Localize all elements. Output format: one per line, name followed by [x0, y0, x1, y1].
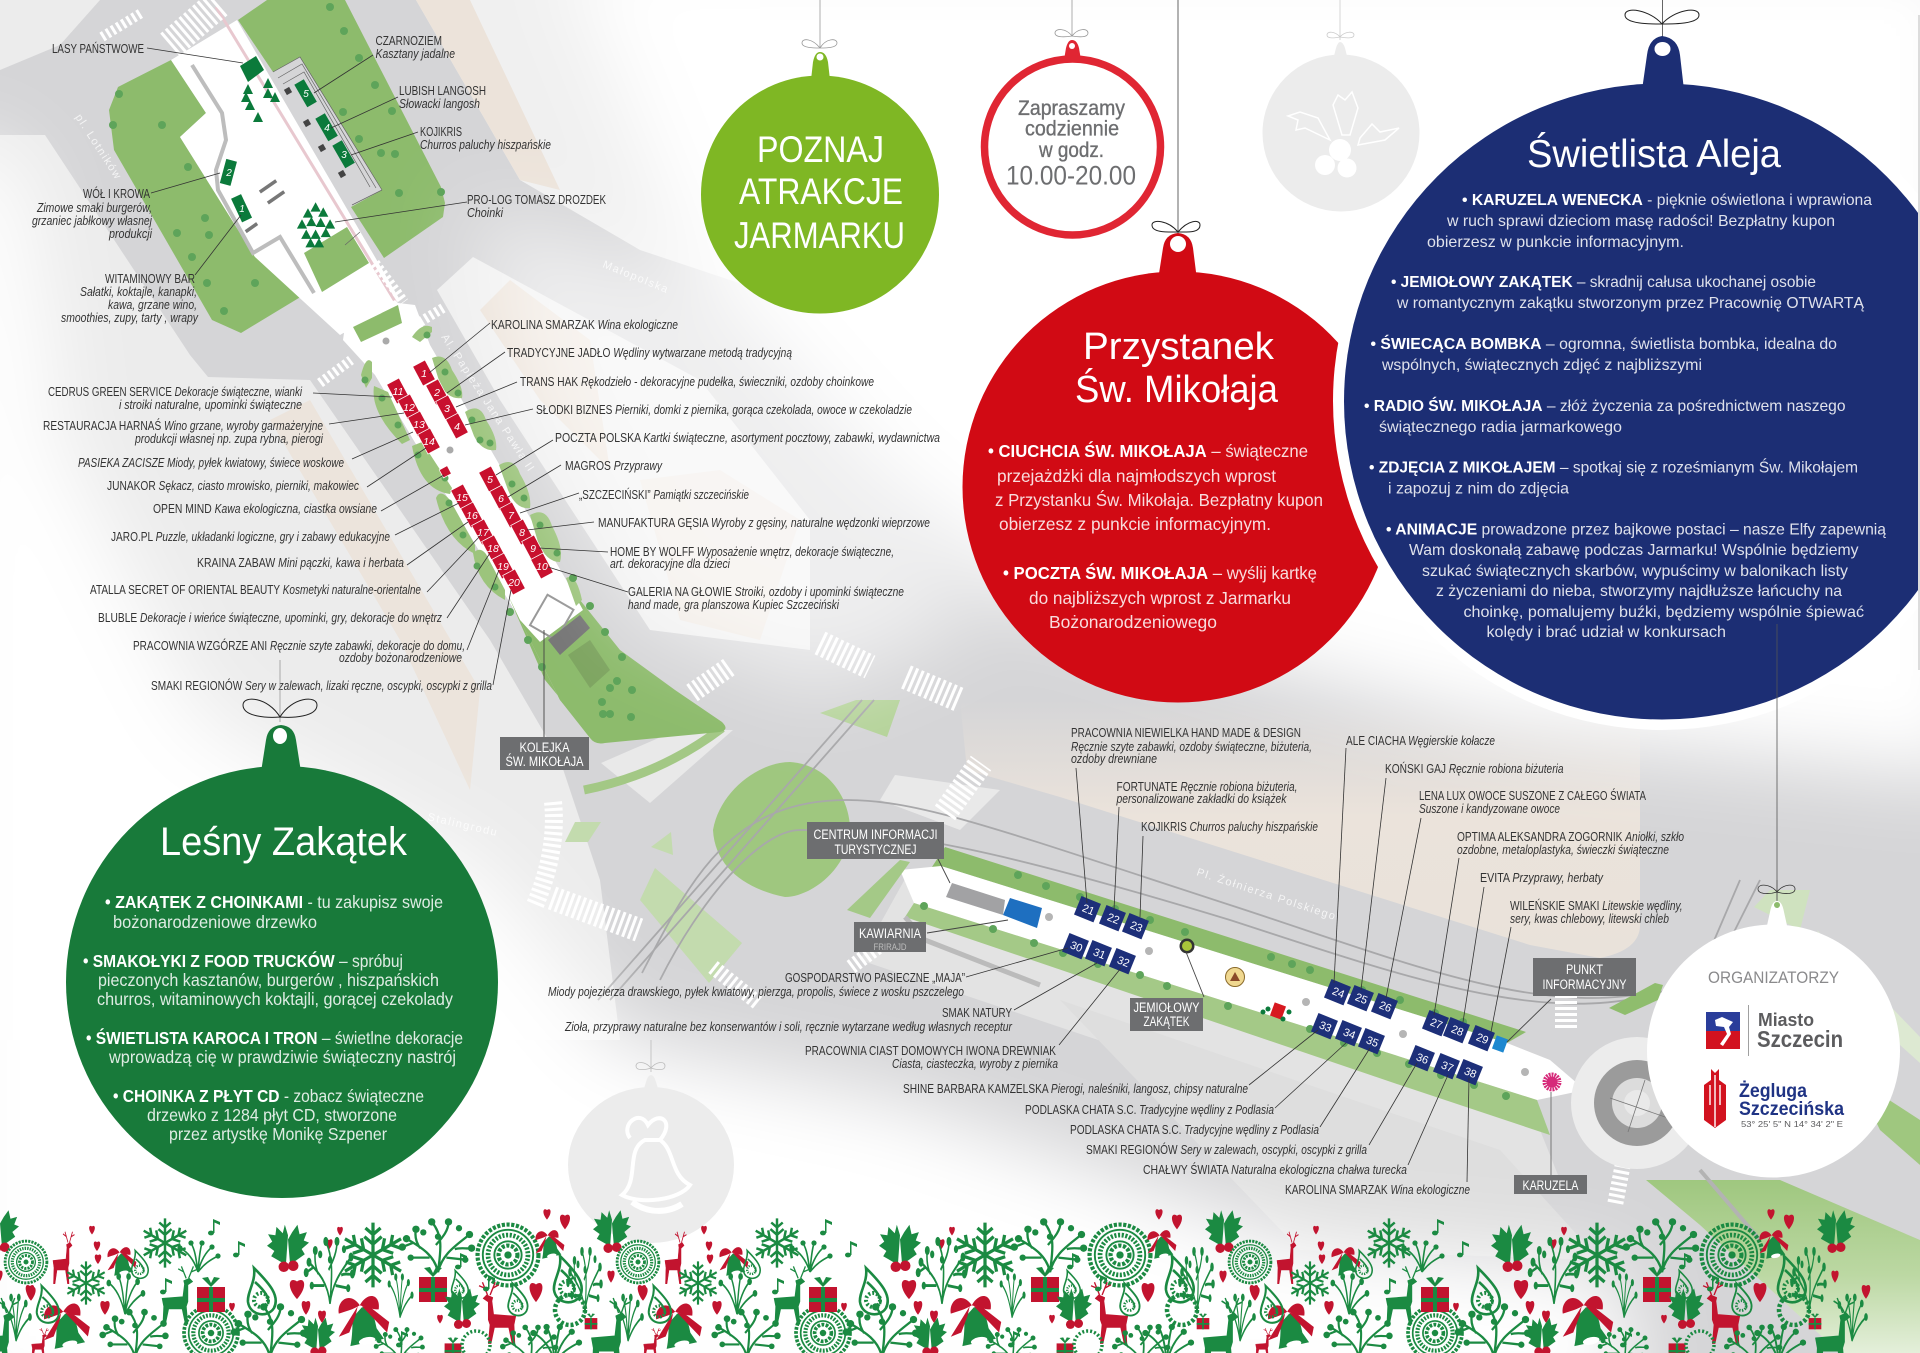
ornament: Leśny Zakątek: wprowadzą cię w prawdziwie świąteczny nastrój — [108, 1047, 456, 1067]
icon: carousel — [1542, 1072, 1562, 1092]
label: Wół i Krowa: Zimowe smaki burgerów, — [36, 201, 152, 215]
ornament: Świetlista Aleja: • RADIO ŚW. MIKOŁAJA – złóż życzenia za pośrednictwem naszego — [1364, 396, 1846, 415]
label: Szczeciński — [520, 487, 749, 513]
label: Atalla: ATALLA SECRET OF ORIENTAL BEAUTY Kosmetyki naturalne-orientalne — [90, 583, 421, 597]
red stalls 1-20: 3 — [444, 403, 450, 415]
ornament: Leśny Zakątek — [66, 660, 498, 1198]
icon: mistletoe — [1180, 938, 1194, 954]
label: Restauracja Harnaś: RESTAURACJA HARNAŚ Wino grzane, wyroby garmażeryjne — [43, 418, 323, 433]
label: Lasy Państwowe — [52, 41, 243, 63]
label: Pro-Log: PRO-LOG TOMASZ DROZDEK — [467, 193, 607, 207]
decorative christmas pattern band — [0, 1209, 1870, 1353]
ornament: Przystanek Św. Mikołaja: do najbliższych wprost z Jarmarku — [1029, 588, 1291, 608]
label: Pracownia Ciast — [805, 968, 1121, 1071]
tag: Jemiołowy Zakątek — [1130, 952, 1204, 1031]
label: Pasieka Zacisze: PASIEKA ZACISZE Miody, pyłek kwiatowy, świece woskowe — [78, 456, 344, 470]
label: Smaki Regionów plaza — [1086, 1063, 1417, 1157]
map labels top — [32, 34, 607, 325]
tag: Punkt Informacyjny: INFORMACYJNY — [1542, 977, 1626, 992]
label: Open Mind: OPEN MIND Kawa ekologiczna, ciastka owsiane — [153, 502, 377, 516]
label: Podlaska Chata 1 — [1025, 1043, 1346, 1117]
label: Lubish Langosh: Słowacki langosh — [399, 97, 480, 111]
ornament: gray holly — [1262, 0, 1420, 212]
label: Pracownia Niewielka: ozdoby drewniane — [1071, 752, 1157, 766]
ornament: Leśny Zakątek: • ZAKĄTEK Z CHOINKAMI - tu zakupisz swoje — [105, 892, 443, 912]
label: Poczta Polska: POCZTA POLSKA Kartki świąteczne, asortyment pocztowy, zabawki, wydawnictwa — [555, 431, 940, 445]
red stalls 1-20: 18 — [487, 543, 499, 555]
navy stalls 21-38: 29 — [1474, 1031, 1490, 1047]
ornament: Leśny Zakątek: • CHOINKA Z PŁYT CD - zobacz świąteczne — [113, 1086, 424, 1106]
tag: Kolejka — [500, 630, 589, 770]
ornament: opening hours: 10.00-20.00 — [1006, 160, 1136, 190]
label: Smaki Regionów: SMAKI REGIONÓW Sery w zalewach, lizaki ręczne, oscypki, oscypki z grilla — [151, 678, 492, 693]
navy stalls 21-38: 22 — [1105, 911, 1121, 927]
label: Maja — [548, 948, 1068, 999]
ornament: opening hours — [984, 0, 1160, 235]
ornament: Świetlista Aleja: obierzesz w punkcie informacyjnym. — [1427, 234, 1684, 251]
ornament: Przystanek Św. Mikołaja: Św. Mikołaja — [1075, 366, 1279, 411]
ornament: Leśny Zakątek: Leśny Zakątek — [160, 820, 408, 864]
label: Koński Gaj: KOŃSKI GAJ Ręcznie robiona biżuteria — [1385, 761, 1564, 776]
label: Pracownia Ciast: PRACOWNIA CIAST DOMOWYCH IWONA DREWNIAK — [805, 1044, 1057, 1058]
label: Czarnoziem: Kasztany jadalne — [376, 47, 455, 61]
label: Słodki Biznes — [465, 403, 912, 425]
label: Czarnoziem — [314, 34, 455, 93]
label: Wileńskie Smaki: WILEŃSKIE SMAKI Litewskie wędliny, — [1510, 898, 1683, 913]
label: Smak Natury: Zioła, przyprawy naturalne bez konserwantów i soli, ręcznie wytarzane według własnych receptur — [564, 1020, 1013, 1034]
ornament: Przystanek Św. Mikołaja: z Przystanku Św. Mikołaja. Bezpłatny kupon — [995, 489, 1323, 510]
ornament: Świetlista Aleja: w romantycznym zakątku stworzonym przez Pracownię OTWARTĄ — [1396, 295, 1864, 312]
label: Ale Ciacha: ALE CIACHA Węgierskie kołacze — [1346, 734, 1495, 748]
ornament: Przystanek Św. Mikołaja: • CIUCHCIA ŚW. MIKOŁAJA – świąteczne — [988, 440, 1308, 461]
label: Galeria na głowie: GALERIA NA GŁOWIE Stroiki, ozdoby i upominki świąteczne — [628, 585, 904, 599]
label: Trans Hak — [456, 375, 874, 407]
label: Pracownia Niewielka: PRACOWNIA NIEWIELKA HAND MADE & DESIGN — [1071, 726, 1301, 740]
label: Kojikris plaza — [1140, 820, 1318, 917]
label: Wzgórze Ani: ozdoby bożonarodzeniowe — [339, 651, 462, 665]
ornament: Leśny Zakątek: • ŚWIETLISTA KAROCA I TRON – świetlne dekoracje — [86, 1027, 463, 1048]
navy stalls 21-38: 34 — [1341, 1026, 1357, 1042]
label: Cedrus: i stroiki naturalne, upominki świąteczne — [119, 398, 302, 412]
ornament: Świetlista Aleja: z życzeniami do nieba, stworzymy najdłuższe łańcuchy na — [1436, 583, 1842, 600]
red stalls 1-20: 16 — [466, 510, 478, 522]
label: Kojikris plaza: KOJIKRIS Churros paluchy hiszpańskie — [1141, 820, 1318, 834]
top plaza kiosks and forest stands: 3 — [341, 150, 347, 161]
label: Fortunate: FORTUNATE Ręcznie robiona biżuteria, — [1116, 780, 1298, 794]
label: Bluble: BLUBLE Dekoracje i wieńce świąteczne, upominki, gry, dekoracje do wnętrz — [98, 611, 443, 625]
navy stalls 21-38: 33 — [1317, 1019, 1333, 1035]
label: Home by Wolff: HOME BY WOLFF Wyposażenie wnętrz, dekoracje świąteczne, — [610, 545, 894, 559]
label: Chałwy Świata — [1143, 1075, 1448, 1177]
ornament: Leśny Zakątek: przez artystkę Monikę Szpener — [169, 1124, 387, 1144]
ornament: gray bell — [568, 1040, 734, 1243]
tag: Punkt Informacyjny: PUNKT — [1566, 962, 1603, 977]
navy stalls 21-38: 21 — [1080, 902, 1096, 918]
tag: Centrum Informacji: CENTRUM INFORMACJI — [814, 827, 938, 842]
label: Podlaska Chata 1: PODLASKA CHATA S.C. Tradycyjne wędliny z Podlasia — [1025, 1103, 1274, 1117]
red stalls 1-20: 6 — [498, 493, 504, 505]
logo: Żegluga Szczecińska: Szczecińska — [1739, 1099, 1844, 1120]
label: Wół i Krowa: WÓŁ I KROWA — [83, 186, 151, 201]
red stalls 1-20: 12 — [403, 402, 415, 414]
rotary — [1571, 1037, 1703, 1169]
label: Szczeciński: „SZCZECIŃSKI” Pamiątki szczecińskie — [579, 487, 749, 502]
gray place tags — [500, 630, 1636, 1194]
label: Optima — [1434, 830, 1684, 1015]
ornament: Poznaj atrakcje jarmarku — [701, 0, 939, 314]
label: Galeria na głowie — [548, 567, 904, 612]
ornament: Poznaj atrakcje jarmarku: ATRAKCJE — [739, 171, 903, 212]
label: Lena Lux: Suszone i kandyzowane owoce — [1419, 802, 1560, 816]
label: Cedrus: CEDRUS GREEN SERVICE Dekoracje świąteczne, wianki — [48, 385, 303, 399]
ornament: Przystanek Św. Mikołaja: Przystanek — [1083, 326, 1275, 368]
ornament: Poznaj atrakcje jarmarku: POZNAJ — [757, 129, 884, 170]
label: Kojikris: KOJIKRIS — [420, 125, 462, 139]
label: Wzgórze Ani: PRACOWNIA WZGÓRZE ANI Ręcznie szyte zabawki, dekoracje do domu, — [133, 638, 465, 653]
map labels plaza lower — [548, 948, 1470, 1197]
navy stalls 21-38: 35 — [1364, 1034, 1380, 1050]
label: Wół i Krowa: produkcji — [108, 227, 153, 241]
ornament: Świetlista Aleja: • ANIMACJE prowadzone przez bajkowe postaci – nasze Elfy zapewnią — [1386, 522, 1886, 538]
label: Wół i Krowa — [32, 173, 220, 241]
street names: Al. Papieża Jana Pawła II — [438, 332, 537, 475]
ornament: Świetlista Aleja: • ZDJĘCIA Z MIKOŁAJEM – spotkaj się z roześmianym Św. Mikołajem — [1369, 458, 1858, 476]
tag: Kawiarnia — [854, 920, 1008, 953]
navy stalls 21-38: 25 — [1353, 991, 1369, 1007]
label: Wzgórze Ani — [133, 570, 499, 665]
navy stalls 21-38: 27 — [1428, 1016, 1444, 1032]
label: Kraina Zabaw: KRAINA ZABAW Mini pączki, kawa i herbata — [197, 556, 404, 570]
label: Karolina Smarzak: KAROLINA SMARZAK Wina ekologiczne — [491, 318, 678, 332]
red stalls 1-20: 11 — [393, 386, 403, 398]
red stalls 1-20: 13 — [413, 419, 425, 431]
label: Jaro.pl: JARO.PL Puzzle, układanki logiczne, gry i zabawy edukacyjne — [111, 530, 390, 544]
tag: Kawiarnia: FRIRAJD — [874, 942, 907, 953]
label: Lena Lux: LENA LUX OWOCE SUSZONE Z CAŁEGO ŚWIATA — [1419, 788, 1647, 803]
label: Restauracja Harnaś: produkcji własnej np. zupa rybna, pierogi — [134, 432, 324, 446]
ornament: Świetlista Aleja: • ŚWIECĄCA BOMBKA – ogromna, świetlista bombka, idealna do — [1370, 334, 1837, 353]
top plaza kiosks and forest stands — [220, 56, 355, 247]
ornament: Świetlista Aleja: i zapozuj z nim do zdjęcia — [1388, 480, 1569, 498]
ornament: opening hours: w godz. — [1038, 139, 1104, 162]
label: Lena Lux — [1386, 788, 1647, 998]
tag: Punkt Informacyjny — [1507, 958, 1636, 1042]
label: Poczta Polska — [496, 431, 940, 475]
ornament: Świetlista Aleja: wspólnych, świątecznych zdjęć z najbliższymi — [1381, 357, 1702, 374]
label: Pracownia Ciast: Ciasta, ciasteczka, wyroby z piernika — [892, 1057, 1058, 1071]
navy stalls 21-38: 26 — [1377, 999, 1393, 1015]
ornament: Świetlista Aleja: Świetlista Aleja — [1527, 131, 1781, 176]
red stalls 1-20: 15 — [456, 492, 468, 504]
map labels plaza upper — [1071, 726, 1684, 1032]
label: Czarnoziem: CZARNOZIEM — [376, 34, 442, 48]
red stalls 1-20 — [382, 338, 553, 595]
label: Tradycyjne Jadło — [447, 346, 792, 393]
map labels street left — [43, 385, 511, 693]
ornament: Świetlista Aleja: • KARUZELA WENECKA - pięknie oświetlona i wprawiona — [1462, 192, 1872, 209]
label: Witaminowy Bar: smoothies, zupy, tarty , wrapy — [61, 311, 199, 325]
ornament: Poznaj atrakcje jarmarku: JARMARKU — [734, 215, 905, 256]
tag: Karuzela — [1514, 1092, 1587, 1194]
ornament: organizers: ORGANIZATORZY — [1708, 968, 1839, 987]
ornament: organizers — [1647, 880, 1900, 1178]
label: Słodki Biznes: SŁODKI BIZNES Pierniki, domki z piernika, gorąca czekolada, owoce w czekoladzie — [536, 403, 912, 417]
map labels street right — [429, 318, 940, 612]
street names: Małopolska — [601, 259, 671, 296]
parks trees — [109, 3, 1510, 1100]
logo: Miasto Szczecin: Miasto — [1758, 1010, 1814, 1030]
ornament: Leśny Zakątek: drzewko z 1284 płyt CD, stworzone — [147, 1105, 397, 1125]
label: Podlaska Chata 2 — [1070, 1048, 1370, 1137]
label: Wół i Krowa: grzaniec jabłkowy własnej — [32, 214, 153, 228]
top plaza kiosks and forest stands: 1 — [239, 204, 245, 215]
ornament: Leśny Zakątek: pieczonych kasztanów, burgerów , hiszpańskich — [98, 970, 439, 990]
ornament: Świetlista Aleja: szukać świątecznych skarbów, wypuścimy w balonikach listy — [1422, 563, 1848, 580]
label: Fortunate — [1114, 780, 1298, 910]
label: Witaminowy Bar: Sałatki, koktajle, kanapki, — [80, 285, 197, 299]
red stalls 1-20: 19 — [497, 561, 509, 573]
ornament: Leśny Zakątek: churros, witaminowych koktajli, gorącej czekolady — [97, 989, 453, 1009]
tag: Kolejka: KOLEJKA — [520, 740, 570, 755]
label: Trans Hak: TRANS HAK Rękodzieło - dekoracyjne pudełka, świeczniki, ozdoby choinkowe — [520, 375, 874, 389]
label: Manufaktura Gęsia: MANUFAKTURA GĘSIA Wyroby z gęsiny, naturalne wędzonki wieprzowe — [598, 516, 930, 530]
navy stalls 21-38: 24 — [1330, 985, 1346, 1001]
navy stalls 21-38 — [946, 883, 1529, 1085]
navy stalls 21-38: 37 — [1439, 1059, 1455, 1075]
navy stalls 21-38: 31 — [1091, 946, 1107, 962]
label: Kojikris: Churros paluchy hiszpańskie — [420, 138, 551, 152]
white cut of navy ornament — [1333, 72, 1920, 730]
label: Wileńskie Smaki — [1491, 898, 1683, 1032]
street names: Stalingrodu — [426, 811, 499, 839]
ornament: opening hours: Zapraszamy — [1018, 97, 1125, 120]
icon: santa stop — [1226, 968, 1244, 986]
label: Kojikris — [351, 125, 551, 155]
right park — [238, 0, 445, 258]
ornament: Leśny Zakątek: • SMAKOŁYKI Z FOOD TRUCKÓW – spróbuj — [83, 950, 403, 971]
top plaza kiosks and forest stands: 5 — [303, 89, 309, 100]
red stalls 1-20: 17 — [477, 527, 490, 539]
ornament: Świetlista Aleja: w ruch sprawi dzieciom masę radości! Bezpłatny kupon — [1446, 213, 1835, 230]
red stalls 1-20: 4 — [454, 421, 460, 433]
label: Home by Wolff: art. dekoracyjne dla dzieci — [610, 557, 731, 571]
navy stalls 21-38: 30 — [1068, 939, 1084, 955]
label: Lubish Langosh: LUBISH LANGOSH — [399, 84, 486, 98]
red stalls 1-20: 1 — [421, 368, 427, 380]
logo: Żegluga Szczecińska — [1704, 1069, 1844, 1129]
tag: Karuzela: KARUZELA — [1522, 1178, 1578, 1193]
tag: Centrum Informacji — [807, 822, 950, 883]
tag: Kawiarnia: KAWIARNIA — [859, 926, 921, 941]
label: Maja: Miody pojezierza drawskiego, pyłek kwiatowy, pierzga, propolis, świece z wosku pszczelego — [548, 985, 964, 999]
street names: Pl. Żołnierza Polskiego — [1195, 865, 1338, 923]
label: Atalla — [90, 535, 481, 597]
label: Tradycyjne Jadło: TRADYCYJNE JADŁO Wędliny wytwarzane metodą tradycyjną — [507, 346, 792, 360]
label: Witaminowy Bar — [61, 215, 241, 325]
ornament: Świetlista Aleja: choinkę, pomalujemy buźki, będziemy wspólnie śpiewać — [1464, 604, 1864, 621]
logo: Żegluga Szczecińska: Żegluga — [1739, 1081, 1807, 1102]
label: Bluble — [98, 553, 490, 625]
navy stalls 21-38: 36 — [1414, 1051, 1430, 1067]
navy stalls 21-38: 23 — [1128, 919, 1144, 935]
red stalls 1-20: 14 — [423, 436, 435, 448]
ornament: Leśny Zakątek: bożonarodzeniowe drzewko — [113, 912, 317, 932]
plaza white — [171, 20, 400, 335]
logo: Miasto Szczecin — [1706, 1005, 1843, 1056]
navy stalls 21-38: 28 — [1449, 1023, 1465, 1039]
tag: Centrum Informacji: TURYSTYCZNEJ — [834, 842, 916, 857]
label: Optima: OPTIMA ALEKSANDRA ZOGORNIK Aniołki, szkło — [1457, 830, 1684, 844]
label: Evita: EVITA Przyprawy, herbaty — [1480, 871, 1604, 885]
ornament: Przystanek Św. Mikołaja: Bożonarodzeniowego — [1049, 612, 1217, 632]
ornament: Przystanek Św. Mikołaja — [962, 0, 1920, 730]
label: Jaro.pl — [111, 503, 459, 544]
label: Kraina Zabaw — [197, 522, 468, 570]
ornament: opening hours: codziennie — [1025, 118, 1119, 140]
label: Smak Natury: SMAK NATURY — [942, 1006, 1013, 1020]
label: Shine: SHINE BARBARA KAMZELSKA Pierogi, naleśniki, langosz, chipsy naturalne — [903, 1082, 1248, 1096]
label: Cedrus — [48, 385, 392, 412]
label: Evita — [1463, 871, 1604, 1022]
upper street — [343, 300, 583, 642]
red stalls 1-20: 8 — [519, 527, 525, 539]
label: Karolina Smarzak plaza: KAROLINA SMARZAK Wina ekologiczne — [1285, 1183, 1470, 1197]
label: Restauracja Harnaś — [43, 413, 404, 446]
red stalls 1-20: 10 — [536, 561, 548, 573]
ornament: Przystanek Św. Mikołaja: • POCZTA ŚW. MIKOŁAJA – wyślij kartkę — [1003, 562, 1317, 583]
logo: Miasto Szczecin: Szczecin — [1757, 1026, 1843, 1052]
label: Magros: MAGROS Przyprawy — [565, 459, 663, 473]
ornament: Przystanek Św. Mikołaja: obierzesz z punkcie informacyjnym. — [999, 514, 1271, 534]
ornament: Świetlista Aleja: świątecznego radia jarmarkowego — [1379, 419, 1622, 436]
street names: pl. Lotników — [72, 112, 124, 182]
label: Chałwy Świata: CHAŁWY ŚWIATA Naturalna ekologiczna chałwa turecka — [1143, 1162, 1407, 1177]
label: Smaki Regionów — [151, 590, 511, 693]
tramway tracks are decorative strokes — [598, 700, 1760, 1004]
label: Fortunate: personalizowane zakładki do książek — [1116, 792, 1287, 806]
label: Smaki Regionów plaza: SMAKI REGIONÓW Sery w zalewach, oscypki, oscypki z grilla — [1086, 1142, 1367, 1157]
plaza lower — [930, 847, 1526, 1043]
label: Koński Gaj — [1361, 761, 1564, 990]
red stalls 1-20: 5 — [487, 474, 493, 486]
label: Pracownia Niewielka: Ręcznie szyte zabawki, ozdoby świąteczne, biżuteria, — [1071, 740, 1312, 754]
crosswalks are decorative — [102, 2, 1625, 1205]
left park — [109, 60, 312, 333]
label: Smak Natury — [564, 963, 1097, 1034]
label: Witaminowy Bar: WITAMINOWY BAR — [105, 272, 195, 286]
top plaza kiosks and forest stands: 4 — [324, 123, 330, 134]
street names — [72, 112, 1338, 923]
label: Home by Wolff — [539, 545, 894, 571]
logo: Żegluga Szczecińska: 53° 25' 5" N 14° 34' 2" E — [1741, 1119, 1843, 1129]
label: Magros — [508, 459, 663, 497]
tag: Jemiołowy Zakątek: JEMIOŁOWY — [1134, 1000, 1200, 1015]
icon: carriage — [1260, 1002, 1292, 1022]
label: Maja: GOSPODARSTWO PASIECZNE „MAJA” — [785, 971, 965, 985]
label: Karolina Smarzak — [429, 318, 678, 373]
red stalls 1-20: 20 — [507, 577, 520, 589]
label: Optima: ozdobne, metaloplastyka, świeczki świąteczne — [1457, 843, 1669, 857]
label: Lasy Państwowe: LASY PAŃSTWOWE — [52, 41, 144, 56]
label: Pro-Log: Choinki — [467, 206, 504, 220]
label: Ale Ciacha — [1334, 734, 1495, 983]
ornament: Przystanek Św. Mikołaja: przejażdżki dla najmłodszych wprost — [997, 466, 1276, 486]
label: Pasieka Zacisze — [78, 432, 413, 470]
label: Shine — [903, 1030, 1318, 1096]
label: Pracownia Niewielka — [1071, 726, 1312, 903]
red stalls 1-20: 7 — [508, 510, 515, 522]
red stalls 1-20: 9 — [530, 543, 536, 555]
label: Wileńskie Smaki: sery, kwas chlebowy, litewski chleb — [1510, 912, 1669, 926]
tag: Jemiołowy Zakątek: ZAKĄTEK — [1144, 1014, 1190, 1029]
label: Open Mind — [153, 475, 444, 516]
ornament: Świetlista Aleja — [1344, 0, 1920, 900]
tag: Kolejka: ŚW. MIKOŁAJA — [506, 754, 584, 769]
label: Junakor: JUNAKOR Sękacz, ciasto mrowisko, pierniki, makowiec — [107, 479, 360, 493]
label: Lubish Langosh — [331, 84, 486, 128]
navy stalls 21-38: 32 — [1115, 954, 1131, 970]
label: Witaminowy Bar: kawa, grzane wino, — [108, 298, 197, 312]
ornament: Świetlista Aleja: Wam doskonałą zabawę podczas Jarmarku! Wspólnie będziemy — [1409, 542, 1858, 559]
label: Podlaska Chata 2: PODLASKA CHATA S.C. Tradycyjne wędliny z Podlasia — [1070, 1123, 1319, 1137]
red stalls 1-20: 2 — [433, 387, 440, 399]
navy stalls 21-38: 38 — [1462, 1065, 1478, 1081]
label: Junakor — [107, 448, 426, 493]
label: Pro-Log — [335, 193, 607, 222]
label: Galeria na głowie: hand made, gra planszowa Kupiec Szczeciński — [628, 598, 840, 612]
top plaza kiosks and forest stands: 2 — [225, 168, 232, 179]
ornament: Świetlista Aleja: • JEMIOŁOWY ZAKĄTEK – skradnij całusa ukochanej osobie — [1391, 274, 1816, 291]
ornament: Świetlista Aleja: kolędy i brać udział w konkursach — [1486, 624, 1726, 641]
